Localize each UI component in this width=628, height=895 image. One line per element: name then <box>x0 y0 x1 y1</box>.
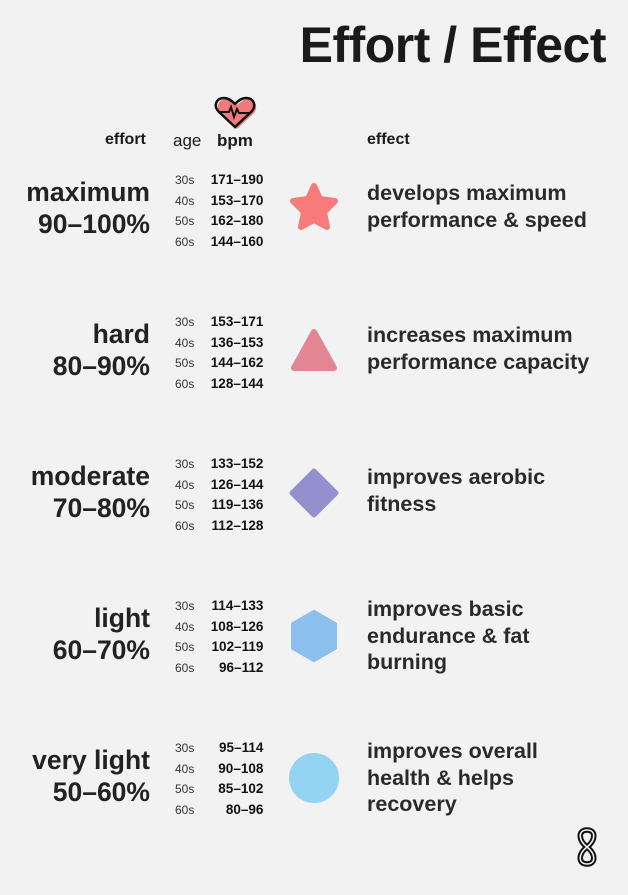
effort label <box>32 745 150 807</box>
bpm table: 30s <box>175 173 194 187</box>
effort label: moderate <box>31 461 150 491</box>
effect text: recovery <box>367 792 457 816</box>
effect text: increases maximum <box>367 323 573 347</box>
bpm table: 40s <box>175 194 194 208</box>
bpm table: 40s <box>175 620 194 634</box>
bpm table: 144–162 <box>211 355 263 370</box>
bpm table: 60s <box>175 519 194 533</box>
effect text <box>367 323 590 374</box>
row: maximum <box>26 172 587 249</box>
bpm table: 153–171 <box>211 314 263 329</box>
effect text: performance capacity <box>367 350 589 374</box>
bpm table <box>175 456 264 533</box>
effort label: 50–60% <box>53 777 150 807</box>
effect text: endurance & fat <box>367 624 529 648</box>
bpm table: 50s <box>175 214 194 228</box>
bpm table: 60s <box>175 803 194 817</box>
effect text: burning <box>367 650 447 674</box>
bpm table: 30s <box>175 315 194 329</box>
effort label: 70–80% <box>53 493 150 523</box>
bpm table: 171–190 <box>211 172 263 187</box>
bpm table: 40s <box>175 478 194 492</box>
bpm table: 144–160 <box>211 234 263 249</box>
bpm table: 85–102 <box>218 781 263 796</box>
effect text: fitness <box>367 492 436 516</box>
bpm table: 133–152 <box>211 456 263 471</box>
effect text <box>367 739 538 816</box>
row: very light <box>32 739 538 817</box>
effort label <box>53 319 150 381</box>
icon: circle <box>289 753 339 803</box>
row: hard <box>53 314 590 391</box>
effect text: improves basic <box>367 597 524 621</box>
icon: star <box>290 183 338 230</box>
bpm table: 80–96 <box>226 802 263 817</box>
header: age: age <box>173 131 201 150</box>
icon: triangle <box>291 329 337 371</box>
effect text: develops maximum <box>367 181 567 205</box>
icon: heart <box>214 96 256 129</box>
bpm table: 95–114 <box>219 740 263 755</box>
effort label: hard <box>93 319 150 349</box>
bpm table <box>175 598 263 675</box>
icon: diamond <box>290 468 338 518</box>
bpm table: 30s <box>175 457 194 471</box>
bpm table: 96–112 <box>219 660 263 675</box>
header: bpm: bpm <box>217 131 253 150</box>
effort label: very light <box>32 745 150 775</box>
effect text: improves overall <box>367 739 538 763</box>
bpm table: 136–153 <box>211 335 263 350</box>
effort label: 80–90% <box>53 351 150 381</box>
bpm table: 30s <box>175 599 194 613</box>
effort label: 90–100% <box>38 209 150 239</box>
row: light <box>53 597 530 675</box>
header: effort: effort <box>105 131 146 148</box>
bpm table: 153–170 <box>211 193 263 208</box>
title: Effort / Effect <box>300 17 606 73</box>
effect text: performance & speed <box>367 208 587 232</box>
bpm table <box>175 740 264 817</box>
bpm table: 40s <box>175 762 194 776</box>
logo: infinity 8 <box>578 827 596 867</box>
bpm table: 60s <box>175 235 194 249</box>
bpm table: 102–119 <box>212 639 263 654</box>
effort label: 60–70% <box>53 635 150 665</box>
effect text: improves aerobic <box>367 465 545 489</box>
row: moderate <box>31 456 545 533</box>
effect text <box>367 597 530 674</box>
bpm table: 112–128 <box>212 518 263 533</box>
effort label <box>26 177 150 239</box>
effort label <box>31 461 150 523</box>
bpm table: 126–144 <box>211 477 263 492</box>
bpm table: 60s <box>175 661 194 675</box>
bpm table: 40s <box>175 336 194 350</box>
effort label: maximum <box>26 177 150 207</box>
effort label: light <box>94 603 150 633</box>
bpm table: 119–136 <box>212 497 263 512</box>
effect text <box>367 181 587 232</box>
bpm table: 50s <box>175 782 194 796</box>
effect text: health & helps <box>367 766 514 790</box>
icon: hexagon <box>291 610 337 662</box>
bpm table: 50s <box>175 498 194 512</box>
bpm table: 162–180 <box>211 213 263 228</box>
bpm table: 60s <box>175 377 194 391</box>
effect text <box>367 465 545 516</box>
bpm table: 90–108 <box>218 761 263 776</box>
bpm table: 108–126 <box>211 619 263 634</box>
bpm table: 50s <box>175 640 194 654</box>
bpm table <box>175 172 263 249</box>
bpm table: 50s <box>175 356 194 370</box>
effort label <box>53 603 150 665</box>
bpm table: 30s <box>175 741 194 755</box>
bpm table: 114–133 <box>212 598 263 613</box>
bpm table: 128–144 <box>211 376 263 391</box>
bpm table <box>175 314 264 391</box>
header: effect: effect <box>367 131 410 148</box>
